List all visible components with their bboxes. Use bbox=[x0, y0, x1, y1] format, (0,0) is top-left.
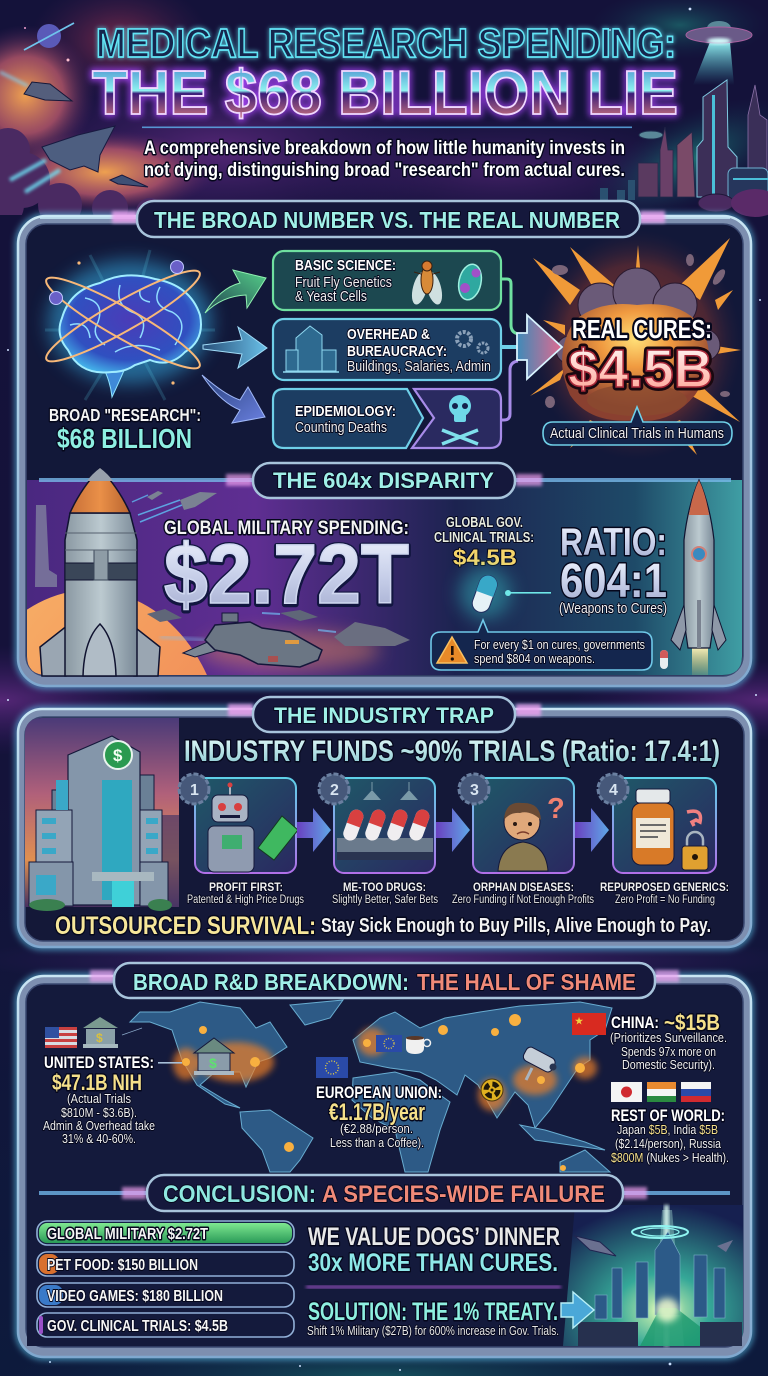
label: broad research: BROAD "RESEARCH": bbox=[49, 405, 201, 425]
icon: gears bbox=[457, 332, 488, 353]
callout: warning bbox=[431, 620, 652, 670]
heading pill: conclusion: CONCLUSION: bbox=[163, 1181, 316, 1208]
arrow: brain to basic science bbox=[205, 270, 266, 313]
label: broad research: $68 BILLION bbox=[57, 423, 192, 454]
icon: pill bottle bbox=[632, 789, 674, 865]
icon: glowing pill with connector bbox=[459, 567, 551, 619]
connectors into real cures arrow bbox=[501, 279, 520, 420]
icon: bank on map bbox=[194, 1038, 234, 1075]
icon: eu flag large bbox=[316, 1057, 348, 1078]
icon: small capsule bbox=[660, 650, 668, 669]
us block: $47.1B NIH bbox=[52, 1070, 142, 1095]
bar: pet food: PET FOOD: $150 BILLION bbox=[47, 1257, 198, 1274]
box: basic science: BASIC SCIENCE: bbox=[295, 257, 396, 274]
captions: the four traps: Zero Funding if Not Enough Profits bbox=[452, 894, 594, 906]
value: 4.5B: $4.5B bbox=[568, 339, 713, 399]
statement: dogs dinner: 30x MORE THAN CURES. bbox=[308, 1249, 558, 1277]
subtitle: not dying, distinguishing broad "research" from actual cures. bbox=[144, 160, 625, 181]
heading pill: broad vs real bbox=[40, 201, 730, 237]
label: actual clinical trials: Actual Clinical Trials in Humans bbox=[550, 425, 724, 442]
title divider bbox=[142, 126, 632, 128]
callout: warning: spend $804 on weapons. bbox=[474, 651, 595, 666]
captions: the four traps: REPURPOSED GENERICS: bbox=[600, 880, 729, 894]
heading line: disparity bbox=[39, 474, 731, 486]
rest of world block: Japan $5B, India $5B bbox=[617, 1122, 718, 1137]
ratio callout: (Weapons to Cures) bbox=[559, 601, 667, 617]
hot spots bbox=[173, 1014, 597, 1171]
captions: the four traps: PROFIT FIRST: bbox=[209, 880, 283, 894]
illustration: planet top left bbox=[24, 23, 74, 50]
illustration: warships bbox=[132, 491, 410, 667]
label: actual clinical trials bbox=[543, 407, 732, 445]
arrow: step 2 to 3 bbox=[436, 808, 470, 852]
value: 2.72T: $2.72T bbox=[164, 527, 409, 621]
solution bbox=[307, 1298, 559, 1338]
solution: SOLUTION: THE 1% TREATY. bbox=[308, 1298, 558, 1326]
box: basic science: & Yeast Cells bbox=[295, 289, 367, 305]
icon: gear badge 1: 1 bbox=[190, 782, 199, 799]
solution: Shift 1% Military ($27B) for 600% increase in Gov. Trials. bbox=[307, 1323, 559, 1338]
panel: hall of shame and conclusion bbox=[18, 976, 751, 1357]
heading pill: the industry trap bbox=[228, 697, 541, 732]
illustration: futuristic skyline top right bbox=[600, 80, 768, 217]
box: overhead and bureaucracy: OVERHEAD & bbox=[347, 326, 430, 343]
box: overhead and bureaucracy bbox=[273, 319, 501, 380]
arrow: brain to epidemiology bbox=[202, 375, 265, 423]
heading pill: hall of shame: THE HALL OF SHAME bbox=[417, 969, 636, 995]
us block: $810M - $3.6B). bbox=[61, 1105, 137, 1120]
icon: yeast cell bbox=[455, 262, 485, 302]
label: clinical trials spending bbox=[434, 515, 534, 570]
bar: video games bbox=[37, 1283, 294, 1307]
china block: CHINA: bbox=[611, 1013, 659, 1032]
icon: sick child bbox=[498, 803, 548, 871]
captions: the four traps bbox=[187, 880, 729, 906]
rest of world block: ($2.14/person), Russia bbox=[615, 1136, 722, 1151]
icon: bank: $ bbox=[96, 1031, 103, 1045]
heading pill: hall of shame bbox=[90, 963, 679, 998]
illustration: pharma headquarters bbox=[25, 718, 179, 911]
icon: china flag: ★ bbox=[575, 1016, 584, 1026]
label: clinical trials spending: $4.5B bbox=[453, 545, 517, 570]
step 1: profit first bbox=[179, 774, 298, 873]
captions: the four traps: Patented & High Price Drugs bbox=[187, 894, 304, 906]
china block: ~$15B bbox=[664, 1010, 720, 1035]
icon: russia flag bbox=[681, 1082, 711, 1102]
title line 1: MEDICAL RESEARCH SPENDING: bbox=[96, 20, 676, 66]
heading pill: conclusion: A SPECIES-WIDE FAILURE bbox=[322, 1181, 605, 1208]
statement: dogs dinner bbox=[308, 1223, 560, 1277]
title line 2: THE $68 BILLION LIE bbox=[92, 59, 678, 128]
captions: the four traps: ORPHAN DISEASES: bbox=[473, 880, 574, 894]
icon: japan flag bbox=[611, 1082, 642, 1102]
eu block: €1.17B/year bbox=[329, 1099, 425, 1126]
icon: glowing brain with orbits bbox=[39, 250, 215, 400]
rest of world block: $800M (Nukes > Health). bbox=[611, 1150, 729, 1165]
box: overhead and bureaucracy: Buildings, Salaries, Admin bbox=[347, 359, 491, 375]
explosion: real cures bbox=[530, 230, 742, 460]
value: 2.72T: $2.72T bbox=[164, 528, 409, 622]
ratio callout: RATIO: bbox=[560, 521, 667, 564]
icon: skull and crossbones bbox=[442, 395, 478, 444]
debris bbox=[545, 254, 730, 408]
icon: fruit fly bbox=[409, 261, 445, 306]
label: global military spending: GLOBAL MILITARY SPENDING: bbox=[164, 518, 409, 539]
eu block: (€2.88/person. bbox=[340, 1121, 413, 1136]
statement: dogs dinner: WE VALUE DOGS’ DINNER bbox=[308, 1223, 560, 1251]
heading pill: broad vs real: THE BROAD NUMBER VS. THE REAL NUMBER bbox=[154, 207, 620, 233]
arrow: solution to future city bbox=[561, 1292, 594, 1328]
icon: gear badge 3: 3 bbox=[470, 782, 479, 799]
world map bbox=[130, 1000, 612, 1172]
rest of world block bbox=[611, 1082, 729, 1165]
icon: bank on map: $ bbox=[209, 1055, 217, 1071]
step 4: repurposed generics bbox=[598, 774, 716, 873]
china block: Domestic Security). bbox=[622, 1057, 715, 1072]
panel: the industry trap bbox=[18, 709, 751, 947]
lower disparity background bbox=[27, 480, 742, 675]
heading pill: the industry trap: THE INDUSTRY TRAP bbox=[274, 703, 494, 728]
arrow: step 1 to 2 bbox=[297, 808, 331, 852]
label: real cures: REAL CURES: bbox=[572, 316, 712, 344]
label: clinical trials spending: CLINICAL TRIALS: bbox=[434, 530, 534, 546]
heading pill: conclusion bbox=[147, 1175, 623, 1211]
captions: the four traps: Zero Profit = No Funding bbox=[615, 894, 715, 906]
box: epidemiology: Counting Deaths bbox=[295, 420, 387, 436]
captions: the four traps: ME-TOO DRUGS: bbox=[343, 880, 426, 894]
box: epidemiology bbox=[273, 389, 501, 448]
bar: government clinical trials bbox=[37, 1313, 294, 1337]
eu block: Less than a Coffee). bbox=[330, 1135, 424, 1150]
label: broad research bbox=[49, 405, 201, 454]
illustration: spaceships left bbox=[0, 72, 148, 192]
us block: UNITED STATES: bbox=[44, 1053, 154, 1072]
illustration: slim rocket right bbox=[671, 480, 726, 675]
icon: china flag bbox=[572, 1013, 606, 1035]
icon: pills on conveyor bbox=[337, 782, 433, 860]
us block bbox=[43, 1017, 182, 1146]
arrow: step 3 to 4 bbox=[575, 808, 609, 852]
icon: gear badge 4: 4 bbox=[609, 782, 618, 799]
box: overhead and bureaucracy: BUREAUCRACY: bbox=[347, 343, 447, 360]
ratio callout: 604:1 bbox=[560, 555, 667, 608]
icon: eu flag small bbox=[376, 1035, 402, 1052]
box: basic science bbox=[273, 251, 501, 310]
captions: the four traps: Slightly Better, Safer Bets bbox=[332, 894, 438, 906]
us block: (Actual Trials bbox=[67, 1091, 131, 1106]
bar: government clinical trials: GOV. CLINICAL TRIALS: $4.5B bbox=[47, 1318, 228, 1335]
rest of world block: REST OF WORLD: bbox=[611, 1106, 725, 1125]
china block: (Prioritizes Surveillance. bbox=[610, 1030, 727, 1045]
illustration: big silver rocket bbox=[40, 468, 160, 676]
panel: broad vs real number bbox=[10, 208, 758, 694]
ratio callout bbox=[559, 521, 667, 617]
glowing divider bbox=[306, 1286, 561, 1288]
icon: lock and refresh arrow bbox=[682, 811, 708, 870]
illustration: future city bbox=[563, 1205, 743, 1346]
box: basic science: Fruit Fly Genetics bbox=[295, 275, 392, 291]
eu block: EUROPEAN UNION: bbox=[316, 1083, 442, 1102]
subtitle: A comprehensive breakdown of how little humanity invests in bbox=[144, 138, 625, 159]
us block: Admin & Overhead take bbox=[43, 1118, 155, 1133]
icon: warning triangle bbox=[437, 637, 467, 663]
bar chart: spending comparison bbox=[37, 1221, 294, 1337]
title line 2: THE $68 BILLION LIE bbox=[92, 59, 678, 128]
icon: us flag bbox=[45, 1027, 77, 1048]
burst spikes bbox=[530, 238, 741, 455]
china block bbox=[572, 1010, 727, 1072]
bar: video games: VIDEO GAMES: $180 BILLION bbox=[47, 1288, 223, 1305]
icon: india flag bbox=[647, 1082, 676, 1102]
callout: warning: For every $1 on cures, governments bbox=[474, 637, 645, 652]
conclusion section background bbox=[27, 1173, 742, 1346]
subtitle bbox=[144, 138, 625, 181]
box: epidemiology: EPIDEMIOLOGY: bbox=[295, 403, 396, 420]
step 2: me-too drugs bbox=[319, 774, 435, 873]
china block: Spends 97x more on bbox=[621, 1044, 716, 1059]
heading pill: hall of shame: BROAD R&D BREAKDOWN: bbox=[133, 969, 409, 995]
step 3: orphan diseases bbox=[459, 774, 574, 873]
tagline: outsourced survival bbox=[55, 912, 711, 940]
bar: global military bbox=[37, 1221, 294, 1245]
us block: 31% & 40-60%. bbox=[62, 1131, 136, 1146]
bar: pet food bbox=[37, 1252, 294, 1276]
value: 4.5B: $4.5B bbox=[568, 339, 713, 399]
icon: surveillance camera bbox=[522, 1045, 557, 1080]
label: clinical trials spending: GLOBAL GOV. bbox=[446, 515, 523, 531]
arrow: into real cures bbox=[517, 315, 562, 379]
illustration: flying saucer and beam bbox=[686, 21, 752, 85]
illustration: pharma headquarters: $ bbox=[113, 746, 123, 765]
heading pill: 604x disparity bbox=[253, 463, 515, 498]
eu block bbox=[316, 1035, 442, 1150]
icon: coffee cup bbox=[406, 1036, 430, 1054]
tagline: outsourced survival: OUTSOURCED SURVIVAL: bbox=[55, 912, 316, 940]
icon: office buildings bbox=[283, 326, 339, 372]
icon: gear badge 2: 2 bbox=[330, 782, 339, 799]
icon: question mark: ? bbox=[547, 793, 565, 825]
heading pill: 604x disparity: THE 604x DISPARITY bbox=[273, 468, 494, 493]
bar: global military: GLOBAL MILITARY $2.72T bbox=[47, 1226, 208, 1243]
icon: radiation symbol bbox=[481, 1079, 503, 1101]
icon: robot with cash bbox=[208, 782, 298, 872]
arrow: brain to overhead bbox=[203, 327, 267, 368]
